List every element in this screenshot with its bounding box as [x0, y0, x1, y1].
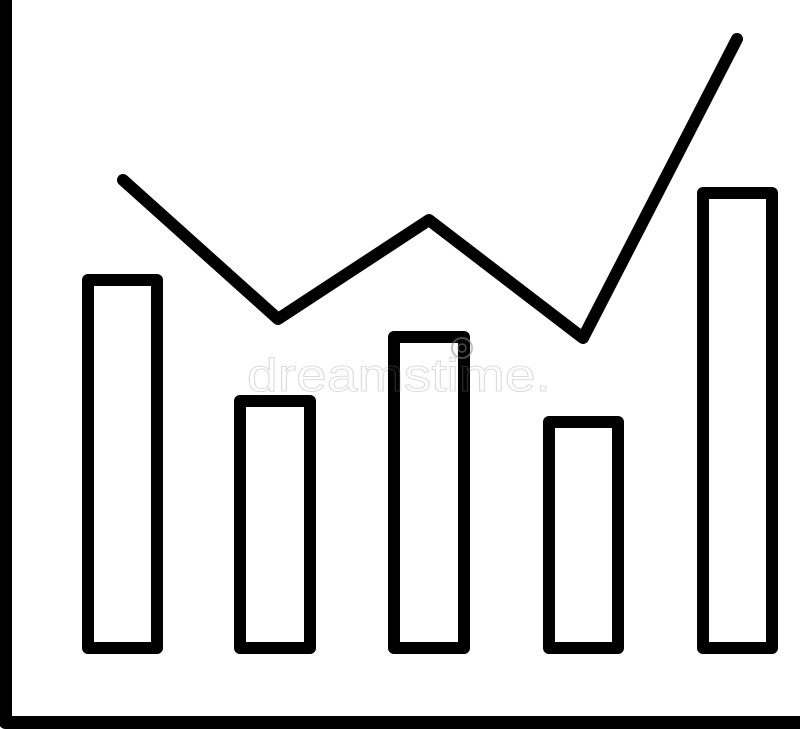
bar 3 [394, 337, 464, 648]
bar 4 [549, 422, 618, 648]
bar 5 [703, 193, 772, 648]
trend line [123, 39, 737, 338]
watermark [247, 338, 551, 401]
bar 1 [88, 280, 157, 648]
bar 2 [240, 401, 310, 648]
bars [88, 193, 772, 648]
watermark: dreamstime. [247, 349, 551, 401]
